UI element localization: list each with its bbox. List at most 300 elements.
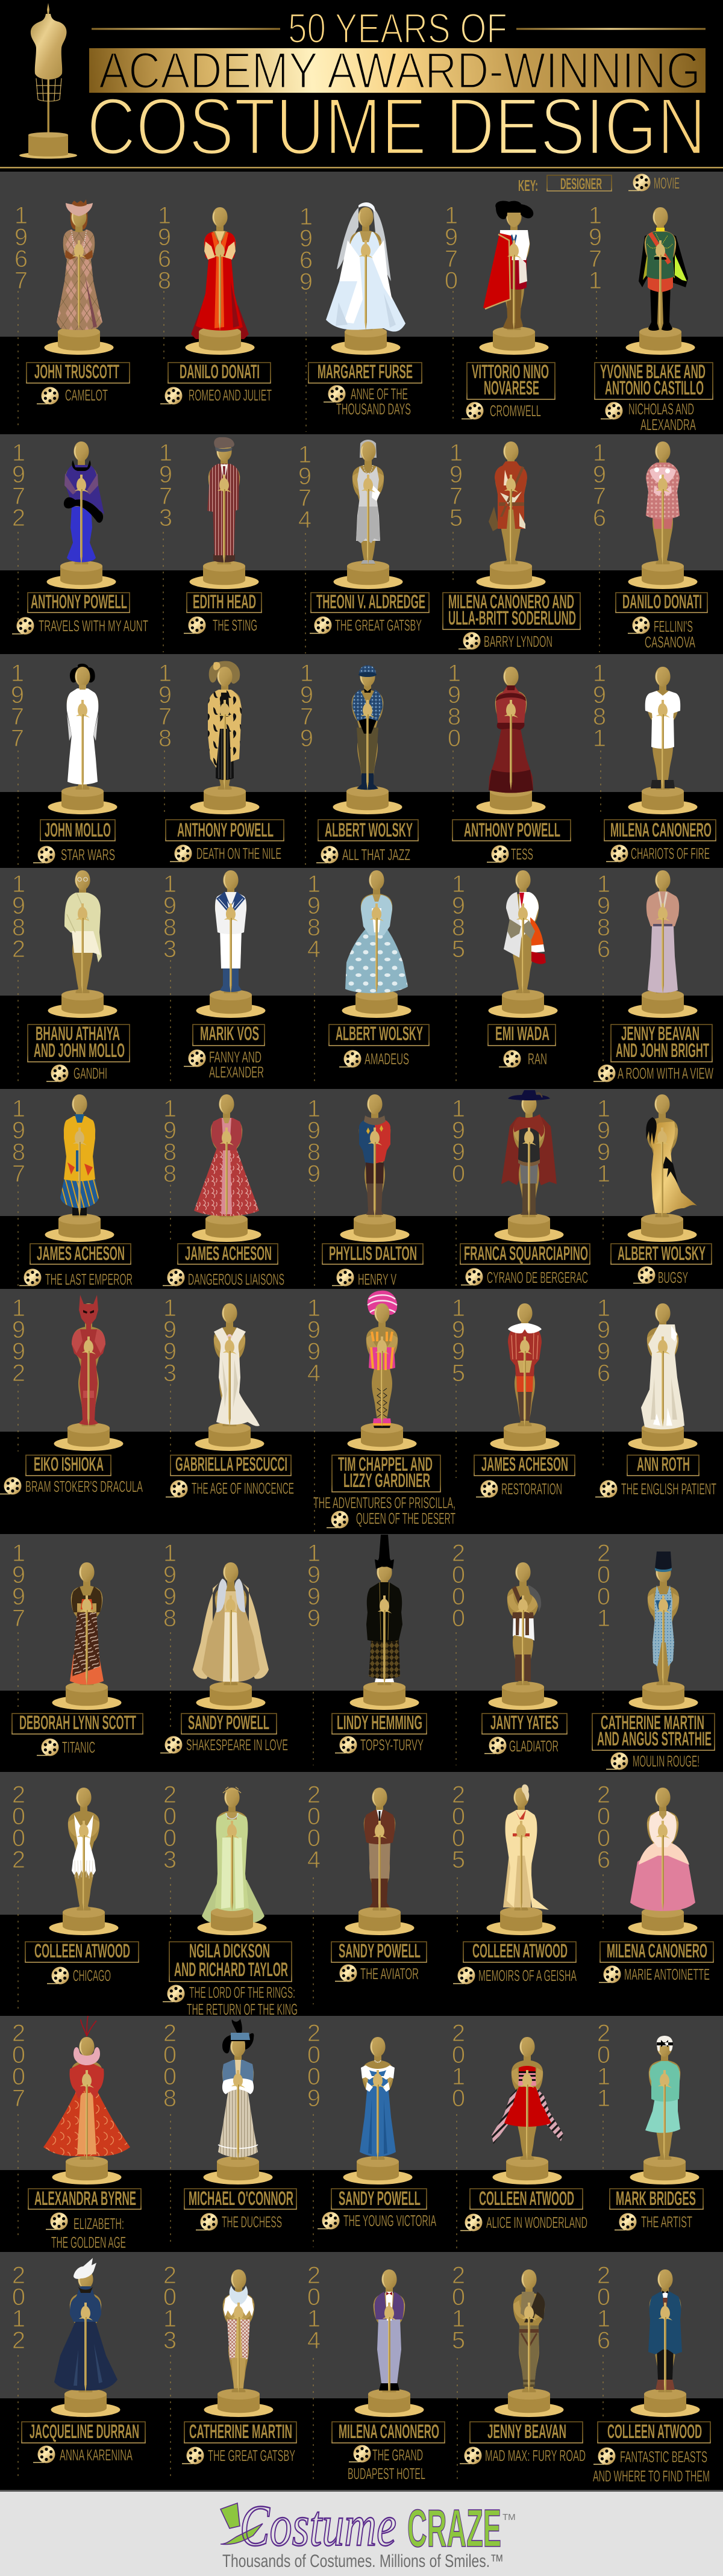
year 1988: 1988 xyxy=(163,1096,177,1187)
year 1998: 1998 xyxy=(163,1540,177,1632)
designer: Milena Canonero xyxy=(332,2421,445,2443)
designer: Lindy Hemming xyxy=(332,1712,427,1734)
movie: Cyrano de Bergerac xyxy=(461,1268,588,1286)
year 1993: 1993 xyxy=(163,1295,177,1386)
entry: 1999 xyxy=(307,1535,427,1765)
entry: 1972 xyxy=(12,440,148,635)
designer: Franca Squarciapino xyxy=(460,1243,590,1264)
logo: Costume Craze: CRAZE xyxy=(407,2498,501,2558)
figure: pale blue Mozart-era gown xyxy=(342,870,411,1018)
designer: Jenny Beavan xyxy=(470,2421,583,2443)
figure: blue and red tabard xyxy=(340,1094,410,1242)
figure: white fringe dress xyxy=(49,1788,118,1935)
movie: The Age of Innocence: THE AGE OF INNOCENCE xyxy=(192,1479,294,1497)
movie: Star Wars: STAR WARS xyxy=(61,846,115,864)
entry: 1994 xyxy=(307,1291,455,1532)
designer: Tim Chappel and Lizzy Gardiner: LIZZY GARDINER xyxy=(343,1470,430,1491)
figure: pale green elven gown xyxy=(198,1787,266,1935)
designer: Colleen Atwood: COLLEEN ATWOOD xyxy=(472,1940,568,1962)
movie: Anne of the Thousand Days xyxy=(324,385,411,418)
movie: Elizabeth: The Golden Age xyxy=(46,2213,126,2251)
year 1985: 1985 xyxy=(452,871,465,962)
movie: Restoration xyxy=(476,1480,562,1498)
movie: The Age of Innocence xyxy=(166,1479,294,1497)
movie: Memoirs of a Geisha: MEMOIRS OF A GEISHA xyxy=(478,1966,577,1985)
tagline: Thousands of Costumes. Millions of Smiles.™ xyxy=(222,2551,504,2571)
designer: Ngila Dickson and Richard Taylor xyxy=(169,1940,292,1982)
movie: Topsy-Turvy xyxy=(335,1736,424,1754)
designer: Margaret Furse: MARGARET FURSE xyxy=(318,361,413,382)
figure: cream kimono xyxy=(487,1785,556,1935)
movie: Nicholas and Alexandra xyxy=(601,400,696,434)
figure: black Japanese coat and tall hat xyxy=(349,1535,419,1710)
entry: 2011 xyxy=(597,2020,703,2231)
entry: 1998 xyxy=(160,1540,288,1754)
designer: Michael O'Connor: MICHAEL O'CONNOR xyxy=(189,2188,293,2209)
title line: 50 years of: 50 YEARS OF xyxy=(288,5,507,52)
figure: dark brocade and orange skirt xyxy=(52,1562,122,1710)
movie: Ran: RAN xyxy=(528,1050,547,1068)
movie: The Adventures of Priscilla, Queen of the Desert: QUEEN OF THE DESERT xyxy=(356,1509,455,1527)
movie: Fellini's Casanova xyxy=(628,617,695,651)
figure: purple and blue gown with black fur xyxy=(47,441,116,589)
figure: red Juliet gown xyxy=(186,207,254,355)
year 1976: 1976 xyxy=(593,440,606,531)
movie: Camelot xyxy=(37,386,108,405)
entry: 1978 xyxy=(158,660,284,862)
year 1975: 1975 xyxy=(449,440,463,531)
figure: white hooded gown with hair buns xyxy=(48,664,117,814)
movie: Anne of the Thousand Days: THOUSAND DAYS xyxy=(336,400,411,418)
designer: Milena Canonero and Ulla-Britt Soderlund xyxy=(443,591,580,629)
year 2003: 2003 xyxy=(163,1782,177,1873)
year 1986: 1986 xyxy=(597,871,610,962)
year 1981: 1981 xyxy=(593,660,606,752)
designer: Colleen Atwood: COLLEEN ATWOOD xyxy=(479,2188,574,2209)
designer: Albert Wolsky xyxy=(318,819,418,841)
footer panel xyxy=(0,2490,723,2576)
entry: 1988 xyxy=(163,1094,284,1288)
movie: The Last Emperor xyxy=(19,1268,133,1288)
entry: 1971 xyxy=(589,202,713,434)
designer: Jacqueline Durran: JACQUELINE DURRAN xyxy=(30,2421,139,2442)
designer: Emi Wada xyxy=(488,1023,556,1046)
movie: The Lord of the Rings: The Return of the King: THE RETURN OF THE KING xyxy=(187,2000,298,2018)
designer: Phyllis Dalton xyxy=(322,1243,423,1264)
key legend: MOVIE xyxy=(654,174,680,192)
entry: 1977 xyxy=(11,660,117,865)
movie: The Young Victoria xyxy=(318,2212,436,2230)
designer: Anthony Powell: ANTHONY POWELL xyxy=(31,591,127,613)
designer: Catherine Martin: CATHERINE MARTIN xyxy=(189,2421,292,2442)
entry: 2016 xyxy=(593,2262,710,2485)
logo: Costume Craze: Costume xyxy=(240,2493,396,2559)
designer: Catherine Martin and Angus Strathie xyxy=(592,1712,715,1750)
movie: Elizabeth: The Golden Age: THE GOLDEN AGE xyxy=(51,2233,126,2251)
movie: Travels with My Aunt xyxy=(12,617,148,635)
figure: red slashed doublet with white collar xyxy=(490,1303,559,1451)
figure: white sailor suit xyxy=(196,870,265,1018)
designer: Anthony Powell xyxy=(166,819,284,841)
movie: The Last Emperor: THE LAST EMPEROR xyxy=(45,1270,133,1288)
designer: Eiko Ishioka: EIKO ISHIOKA xyxy=(34,1453,104,1475)
figure: teal 1920s dress and cloche xyxy=(630,2036,699,2185)
movie: Barry Lyndon: BARRY LYNDON xyxy=(484,632,552,650)
designer: Emi Wada: EMI WADA xyxy=(495,1023,549,1044)
figure: red cape with navy hat xyxy=(494,1090,564,1242)
figure: purple concierge uniform xyxy=(354,2269,424,2417)
header xyxy=(0,3,723,172)
year 2011: 2011 xyxy=(597,2020,610,2112)
designer: Theoni V. Aldredge xyxy=(311,591,429,613)
movie: Fantastic Beasts and Where to Find Them xyxy=(593,2448,710,2485)
designer: Michael O'Connor xyxy=(184,2188,296,2209)
entry: 1990 xyxy=(452,1090,590,1286)
movie: Chicago xyxy=(47,1966,111,1985)
figure: beaded blue dress and top hat xyxy=(629,1552,698,1710)
figure: flip-flop dress and pink headdress xyxy=(347,1291,417,1451)
movie: Amadeus: AMADEUS xyxy=(365,1050,409,1068)
entry: 1974 xyxy=(298,440,429,653)
figure: ivory mermaid gown xyxy=(195,1303,264,1451)
movie: Shakespeare in Love xyxy=(160,1736,288,1754)
movie: Amadeus xyxy=(339,1050,409,1068)
designer: Albert Wolsky: ALBERT WOLSKY xyxy=(336,1023,423,1044)
movie: The Aviator xyxy=(335,1965,419,1983)
designer: Colleen Atwood xyxy=(25,1940,139,1962)
designer: James Acheson xyxy=(30,1243,131,1264)
entry: 1975 xyxy=(443,440,580,650)
movie: Dangerous Liaisons xyxy=(163,1268,284,1288)
logo: Costume Craze: TM xyxy=(502,2512,516,2522)
entry: 1987 xyxy=(12,1094,133,1288)
movie: The Grand Budapest Hotel: BUDAPEST HOTEL xyxy=(348,2465,425,2483)
designer: Janty Yates: JANTY YATES xyxy=(490,1712,559,1733)
designer: Eiko Ishioka xyxy=(26,1453,111,1476)
designer: Albert Wolsky: ALBERT WOLSKY xyxy=(325,819,413,841)
year 2016: 2016 xyxy=(597,2262,610,2354)
movie: Chicago: CHICAGO xyxy=(73,1966,111,1985)
designer: Danilo Donati xyxy=(168,361,271,383)
movie: Restoration: RESTORATION xyxy=(501,1480,562,1498)
figure: golden Elizabethan gown with cape xyxy=(193,1562,269,1710)
entry: 2005 xyxy=(452,1782,577,1985)
designer: Ngila Dickson and Richard Taylor: AND RICHARD TAYLOR xyxy=(174,1959,288,1980)
figure: khadi wrap and round glasses xyxy=(48,870,117,1018)
movie: Anna Karenina xyxy=(33,2445,133,2464)
movie: Gandhi xyxy=(46,1064,107,1082)
figure: gold and black robe with turban xyxy=(190,661,259,814)
designer: Vittorio Nino Novarese: NOVARESE xyxy=(484,377,539,399)
entry: 1995 xyxy=(452,1295,575,1498)
year 2008: 2008 xyxy=(163,2020,177,2112)
designer: Gabriella Pescucci xyxy=(171,1453,291,1476)
entry: 1997 xyxy=(12,1540,143,1756)
movie: Moulin Rouge! xyxy=(606,1752,700,1770)
entry: 1980 xyxy=(448,660,571,863)
movie: The Artist xyxy=(615,2213,692,2231)
year 1995: 1995 xyxy=(452,1295,465,1386)
movie: The Lord of the Rings: The Return of the King: THE LORD OF THE RINGS: xyxy=(189,1983,295,2001)
entry: 1979 xyxy=(300,660,418,865)
year 1994: 1994 xyxy=(307,1295,321,1386)
year 2010: 2010 xyxy=(452,2020,465,2112)
entry: 2002 xyxy=(12,1782,139,2012)
movie: Fanny and Alexander: FANNY AND xyxy=(209,1048,261,1066)
entry: 2000 xyxy=(452,1540,567,1765)
year 2009: 2009 xyxy=(307,2020,321,2112)
movie: Cromwell xyxy=(462,402,541,420)
figure: pink lace dress xyxy=(628,441,698,589)
year 2015: 2015 xyxy=(452,2262,465,2354)
year 2014: 2014 xyxy=(307,2262,321,2354)
figure: white running kit xyxy=(628,667,698,814)
entry: 1976 xyxy=(593,440,707,652)
year 1991: 1991 xyxy=(597,1096,610,1187)
designer: Bhanu Athaiya and John Mollo: BHANU ATHAIYA xyxy=(36,1023,120,1044)
designer: Bhanu Athaiya and John Mollo: AND JOHN MOLLO xyxy=(34,1040,125,1061)
movie: Romeo and Juliet xyxy=(160,386,272,405)
entry: 1983 xyxy=(163,870,265,1082)
figure: red pinstripe suit and cap xyxy=(189,437,259,589)
entry: 1969 xyxy=(299,202,422,432)
year 1978: 1978 xyxy=(158,660,172,752)
figure: green military jacket with cape xyxy=(625,207,695,355)
figure: pink Marie Antoinette gown xyxy=(628,1788,698,1935)
movie: Tess: TESS xyxy=(511,845,533,863)
year 1968: 1968 xyxy=(158,202,171,294)
movie: The Great Gatsby xyxy=(182,2447,295,2465)
figure: red armour with horned helm xyxy=(54,1295,123,1451)
designer: Phyllis Dalton: PHYLLIS DALTON xyxy=(329,1243,417,1264)
year 1989: 1989 xyxy=(307,1096,321,1187)
movie: Elizabeth: The Golden Age: ELIZABETH: xyxy=(74,2215,124,2233)
entry: 1991 xyxy=(597,1094,712,1286)
entry: 2013 xyxy=(163,2262,296,2480)
movie: Mad Max: Fury Road: MAD MAX: FURY ROAD xyxy=(485,2447,586,2465)
year 1987: 1987 xyxy=(12,1096,25,1187)
movie: The Great Gatsby xyxy=(310,616,422,634)
movie: Dangerous Liaisons: DANGEROUS LIAISONS xyxy=(188,1270,284,1288)
designer: Milena Canonero and Ulla-Britt Soderlund: ULLA-BRITT SODERLUND xyxy=(448,607,576,629)
movie: Titanic: TITANIC xyxy=(62,1738,95,1756)
entry: 1968 xyxy=(158,202,272,405)
figure: red dress with striped shawl xyxy=(492,2037,563,2185)
entry: 1970 xyxy=(445,201,555,420)
entry: 2012 xyxy=(12,2258,145,2480)
year 1992: 1992 xyxy=(12,1295,25,1386)
figure: red coat with satchel xyxy=(476,441,546,589)
year 1997: 1997 xyxy=(12,1540,25,1632)
movie: Travels with My Aunt: TRAVELS WITH MY AUNT xyxy=(39,617,148,635)
year 1974: 1974 xyxy=(298,441,311,533)
year 2013: 2013 xyxy=(163,2262,177,2354)
entry: 2007 xyxy=(12,2016,141,2251)
movie: The Grand Budapest Hotel xyxy=(348,2445,425,2483)
movie: Fanny and Alexander: ALEXANDER xyxy=(209,1063,264,1081)
designer: Anthony Powell: ANTHONY POWELL xyxy=(464,819,560,841)
figure: Duchess hat and beige striped gown xyxy=(204,2019,272,2185)
designer: Sandy Powell xyxy=(181,1712,277,1734)
movie: Anne of the Thousand Days: ANNE OF THE xyxy=(351,385,408,403)
designer: Yvonne Blake and Antonio Castillo xyxy=(595,361,713,399)
movie: Star Wars xyxy=(33,846,115,864)
movie: Shakespeare in Love: SHAKESPEARE IN LOVE xyxy=(186,1736,288,1754)
designer: Vittorio Nino Novarese xyxy=(467,361,555,399)
entry: 1984 xyxy=(307,870,429,1082)
designer: Lindy Hemming: LINDY HEMMING xyxy=(337,1712,422,1733)
designer: Sandy Powell xyxy=(331,2188,427,2209)
movie: The Great Gatsby: THE GREAT GATSBY xyxy=(208,2447,295,2465)
movie: Gladiator: GLADIATOR xyxy=(509,1737,559,1755)
year 1983: 1983 xyxy=(163,871,177,962)
year 2000: 2000 xyxy=(452,1540,465,1632)
designer: Janty Yates xyxy=(482,1712,567,1734)
entry: 1981 xyxy=(593,660,716,862)
movie: All That Jazz: ALL THAT JAZZ xyxy=(342,846,410,864)
designer: Albert Wolsky xyxy=(329,1023,429,1046)
figure: yellow imperial robe with blue stripes xyxy=(45,1094,114,1242)
entry: 1989 xyxy=(307,1094,423,1288)
title line: 50 years of xyxy=(92,5,706,52)
movie: The Aviator: THE AVIATOR xyxy=(360,1965,419,1983)
figure: red Elizabethan gown with ruff xyxy=(43,2016,130,2185)
entry: 1996 xyxy=(595,1295,716,1498)
movie: Fellini's Casanova: FELLINI'S xyxy=(654,617,693,635)
entry: 1982 xyxy=(12,870,130,1082)
figure: dark red Victorian gown xyxy=(476,667,546,814)
year 2002: 2002 xyxy=(12,1782,25,1873)
designer: Catherine Martin xyxy=(184,2421,296,2443)
movie: The Grand Budapest Hotel: THE GRAND xyxy=(372,2446,423,2464)
figure: Furiosa wraps and harness xyxy=(494,2269,564,2417)
movie: Tess xyxy=(487,845,533,863)
designer: Colleen Atwood: COLLEEN ATWOOD xyxy=(34,1940,130,1962)
designer: Margaret Furse xyxy=(308,361,422,383)
year 1969: 1969 xyxy=(299,204,313,295)
year 1980: 1980 xyxy=(448,660,461,752)
movie: Alice in Wonderland xyxy=(460,2213,587,2231)
entry: 2004 xyxy=(307,1782,427,2004)
figure: cream veil gown xyxy=(628,1303,698,1451)
figure: red cape and black hat xyxy=(480,201,548,355)
designer: Danilo Donati: DANILO DONATI xyxy=(180,361,260,382)
designer: Alexandra Byrne xyxy=(28,2188,141,2209)
designer: Colleen Atwood xyxy=(463,1940,576,1962)
movie: Ran xyxy=(499,1050,547,1068)
movie: All That Jazz xyxy=(316,846,410,864)
year 1971: 1971 xyxy=(589,202,602,294)
movie: Bram Stoker's Dracula: BRAM STOKER'S DRACULA xyxy=(25,1477,143,1495)
figure: blue Victorian dress xyxy=(343,2037,412,2185)
movie: Henry V xyxy=(332,1268,396,1288)
movie: The Duchess: THE DUCHESS xyxy=(222,2213,282,2231)
designer: John Truscott: JOHN TRUSCOTT xyxy=(34,361,119,382)
year 1996: 1996 xyxy=(597,1295,610,1386)
designer: Deborah Lynn Scott: DEBORAH LYNN SCOTT xyxy=(19,1712,136,1733)
designer: Sandy Powell: SANDY POWELL xyxy=(339,1940,421,1962)
movie: Bugsy: BUGSY xyxy=(658,1268,688,1286)
movie: Titanic xyxy=(37,1738,95,1756)
designer: James Acheson: JAMES ACHESON xyxy=(37,1243,125,1264)
key legend: KEY: xyxy=(518,176,538,195)
figure: white bridal gown with veil xyxy=(326,202,405,355)
designer: Sandy Powell: SANDY POWELL xyxy=(188,1712,269,1733)
designer: Sandy Powell xyxy=(331,1940,427,1962)
entry: 2010 xyxy=(452,2020,587,2248)
designer: Anthony Powell: ANTHONY POWELL xyxy=(177,819,274,841)
designer: Jacqueline Durran xyxy=(22,2421,145,2443)
designer: Edith Head: EDITH HEAD xyxy=(193,591,256,613)
movie: Fanny and Alexander xyxy=(184,1048,264,1081)
movie: The Adventures of Priscilla, Queen of the Desert xyxy=(313,1494,455,1529)
movie: Topsy-Turvy: TOPSY-TURVY xyxy=(360,1736,424,1754)
movie: Anna Karenina: ANNA KARENINA xyxy=(60,2446,133,2464)
entry: 1992 xyxy=(0,1295,143,1495)
entry: 1967 xyxy=(14,199,130,427)
movie: The Adventures of Priscilla, Queen of the Desert: THE ADVENTURES OF PRISCILLA, xyxy=(313,1494,455,1512)
movie: Mad Max: Fury Road xyxy=(460,2447,586,2465)
year 1982: 1982 xyxy=(12,871,25,962)
designer: James Acheson: JAMES ACHESON xyxy=(185,1243,272,1264)
movie: Death on the Nile: DEATH ON THE NILE xyxy=(196,844,281,862)
entry: 2009 xyxy=(307,2020,436,2247)
movie: Henry V: HENRY V xyxy=(358,1270,396,1288)
year 1973: 1973 xyxy=(159,440,172,531)
entry: 1985 xyxy=(452,870,558,1082)
designer: Jenny Beavan: JENNY BEAVAN xyxy=(487,2421,566,2442)
designer: Marik Vos: MARIK VOS xyxy=(200,1023,259,1044)
movie: Chariots of Fire xyxy=(606,844,710,862)
figure: blue long coat xyxy=(630,2269,700,2417)
movie: The Duchess xyxy=(196,2213,282,2231)
movie: The Great Gatsby: THE GREAT GATSBY xyxy=(335,616,422,634)
figure: pale scarf, fringe top and check skirt xyxy=(204,2269,274,2417)
entry: 2014 xyxy=(307,2262,445,2483)
movie: Camelot: CAMELOT xyxy=(65,386,108,404)
designer: Franca Squarciapino: FRANCA SQUARCIAPINO xyxy=(464,1243,588,1264)
designer: Milena Canonero: MILENA CANONERO xyxy=(339,2421,439,2442)
movie: The Young Victoria: THE YOUNG VICTORIA xyxy=(343,2212,436,2230)
figure: silver flapper dress xyxy=(334,440,402,589)
entry: 1973 xyxy=(159,437,261,652)
designer: Marik Vos xyxy=(193,1023,264,1046)
entry: 2015 xyxy=(452,2262,586,2480)
designer: Bhanu Athaiya and John Mollo xyxy=(28,1023,130,1062)
year 2005: 2005 xyxy=(452,1782,465,1873)
year 1999: 1999 xyxy=(307,1540,321,1632)
designer: Theoni V. Aldredge: THEONI V. ALDREDGE xyxy=(316,591,425,613)
designer: Anthony Powell xyxy=(452,819,571,841)
figure: white robe with red drape xyxy=(488,870,558,1018)
year 1984: 1984 xyxy=(307,871,321,962)
designer: Tim Chappel and Lizzy Gardiner xyxy=(332,1453,440,1492)
figure: blue sequin jacket and bowler hat xyxy=(333,665,402,814)
year 1970: 1970 xyxy=(445,202,458,294)
figure: red brocade court gown xyxy=(192,1094,261,1242)
designer: John Mollo: JOHN MOLLO xyxy=(45,819,111,841)
figure: navy Russian gown with white feather hat xyxy=(51,2258,120,2417)
year 1977: 1977 xyxy=(11,660,24,752)
movie: Alice in Wonderland: ALICE IN WONDERLAND xyxy=(486,2213,587,2231)
entry: 2003 xyxy=(163,1782,298,2018)
figure: gold gown with black feathers xyxy=(628,1094,697,1242)
movie: Cyrano de Bergerac: CYRANO DE BERGERAC xyxy=(487,1268,588,1286)
year 2007: 2007 xyxy=(12,2020,25,2112)
year 1972: 1972 xyxy=(12,440,25,531)
movie: Romeo and Juliet: ROMEO AND JULIET xyxy=(189,386,272,404)
designer: Anthony Powell xyxy=(28,591,130,613)
